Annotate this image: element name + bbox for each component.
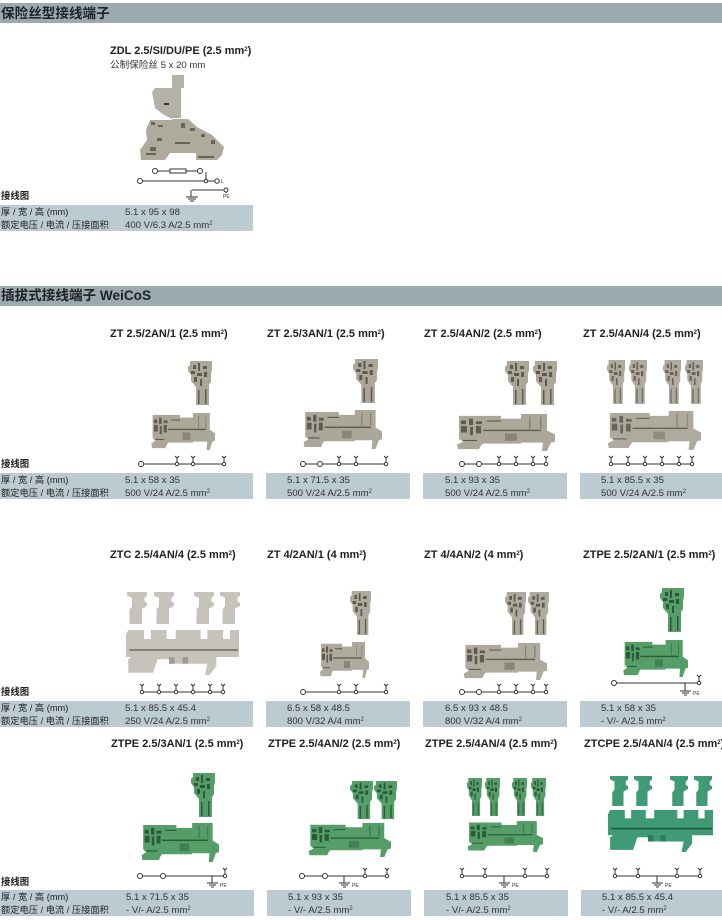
row 3 side labels: 厚 / 宽 / 高 (mm) [1, 891, 68, 902]
spec table: 5.1 x 58 x 35 [601, 703, 656, 714]
spec table: - V/- A/2.5 mm [601, 716, 662, 727]
product: ZTPE 2.5/2AN/1 [580, 549, 722, 727]
spec table [0, 701, 253, 727]
product: ZDL 2.5/SI/DU/PE: ZDL 2.5/SI/DU/PE (2.5 mm [110, 45, 244, 57]
product: ZTPE 2.5/4AN/4 [424, 738, 568, 916]
spec table: 5.1 x 93 x 35 [445, 475, 500, 486]
product: ZT 4/2AN/1: 2 [359, 551, 363, 557]
heading: fuse terminals [0, 3, 722, 23]
product: ZTPE 2.5/4AN/4: 2 [550, 740, 554, 746]
spec table: 2 [663, 906, 667, 912]
spec table: ZDL: 厚 / 宽 / 高 (mm) [1, 206, 68, 217]
spec table: 250 V/24 A/2.5 mm [125, 716, 207, 727]
spec table: ZDL [0, 205, 253, 231]
spec table: - V/- A/2.5 mm [288, 905, 349, 916]
spec table: 500 V/24 A/2.5 mm [125, 488, 207, 499]
wiring diagram [138, 868, 227, 889]
wiring diagram: PE [665, 883, 672, 889]
spec table: - V/- A/2.5 mm [126, 905, 187, 916]
spec table [423, 701, 567, 727]
image: fuse terminal block [140, 75, 224, 160]
spec table: 2 [207, 717, 211, 723]
heading: plug-in terminals [0, 286, 722, 306]
row 2 side labels [1, 686, 109, 726]
product: ZT 2.5/4AN/2: 2 [535, 330, 539, 336]
spec table: 5.1 x 85.5 x 45.4 [125, 703, 197, 714]
wiring diagram: ZDL: L [221, 179, 224, 185]
product: ZT 2.5/4AN/2: ) [538, 328, 542, 340]
product: ZTPE 2.5/3AN/1: ZTPE 2.5/3AN/1 (2.5 mm [111, 738, 236, 750]
product: ZTCPE 2.5/4AN/4: 2 [717, 740, 721, 746]
product: ZT 4/2AN/1 [266, 549, 410, 727]
wiring label: 接线图 [1, 190, 29, 201]
wiring diagram [300, 684, 388, 694]
spec table: 5.1 x 71.5 x 35 [126, 892, 189, 903]
product: ZT 2.5/2AN/1: ZT 2.5/2AN/1 (2.5 mm [110, 328, 221, 340]
product: ZTC 2.5/4AN/4: ) [232, 549, 236, 561]
row 1 side labels: 额定电压 / 电流 / 压接面积 [1, 487, 109, 498]
product: ZT 2.5/2AN/1: 2 [221, 330, 225, 336]
heading: plug-in terminals: 插拔式接线端子 WeiCoS [1, 287, 151, 303]
product: ZTPE 2.5/2AN/1: 2 [708, 551, 712, 557]
spec table: 5.1 x 58 x 35 [125, 475, 180, 486]
row 2 side labels: 接线图 [1, 686, 29, 697]
spec table: 800 V/32 A/4 mm [287, 716, 361, 727]
product: ZT 2.5/4AN/4 [580, 328, 722, 499]
wiring diagram [140, 684, 225, 694]
spec table: 500 V/24 A/2.5 mm [287, 488, 369, 499]
row 2 side labels: 额定电压 / 电流 / 压接面积 [1, 715, 109, 726]
spec table: 5.1 x 85.5 x 35 [446, 892, 509, 903]
row 1 side labels [1, 458, 109, 498]
spec table [267, 890, 411, 916]
spec table [581, 890, 722, 916]
product: ZDL 2.5/SI/DU/PE [0, 45, 253, 231]
spec table: 2 [207, 489, 211, 495]
row 3 side labels: 接线图 [1, 876, 29, 887]
image: terminal [457, 361, 557, 451]
product: ZT 2.5/4AN/4: 2 [694, 330, 698, 336]
product: ZT 4/4AN/2: ZT 4/4AN/2 (4 mm [424, 549, 516, 561]
product: ZTPE 2.5/4AN/4: ) [554, 738, 558, 750]
spec table: 2 [187, 906, 191, 912]
spec table: 2 [527, 489, 531, 495]
wiring diagram: PE [693, 691, 700, 697]
spec table [266, 701, 410, 727]
product: ZDL 2.5/SI/DU/PE: 公制保险丝 5 x 20 mm [110, 59, 205, 71]
product: ZT 4/4AN/2 [423, 549, 567, 727]
spec table: ZDL: 400 V/6.3 A/2.5 mm [125, 220, 209, 231]
spec table: ZDL: 2 [209, 221, 213, 227]
spec table: ZDL: 5.1 x 95 x 98 [125, 207, 180, 218]
product: ZTPE 2.5/4AN/2: 2 [393, 740, 397, 746]
wiring diagram: ZDL: PE [223, 194, 230, 200]
wiring diagram: ZDL [138, 168, 230, 201]
product: ZT 2.5/4AN/2 [423, 328, 567, 499]
spec table: 2 [507, 906, 511, 912]
product: ZT 2.5/3AN/1: ZT 2.5/3AN/1 (2.5 mm [267, 328, 378, 340]
spec table: 2 [369, 489, 373, 495]
wiring diagram: PE [220, 883, 227, 889]
product: ZT 4/2AN/1: ) [363, 549, 367, 561]
spec table [424, 890, 568, 916]
spec table: 800 V/32 A/4 mm [445, 716, 519, 727]
image: terminal [151, 361, 215, 450]
product: ZTC 2.5/4AN/4: 2 [229, 551, 233, 557]
spec table: 500 V/24 A/2.5 mm [445, 488, 527, 499]
row 1 side labels: 厚 / 宽 / 高 (mm) [1, 474, 68, 485]
product: ZTPE 2.5/4AN/2 [267, 738, 411, 916]
wiring diagram [460, 868, 549, 889]
product: ZTPE 2.5/3AN/1 [0, 738, 254, 916]
spec table [580, 701, 722, 727]
image: terminal [607, 360, 703, 450]
product: ZT 2.5/3AN/1: ) [381, 328, 385, 340]
product: ZT 4/2AN/1: ZT 4/2AN/1 (4 mm [267, 549, 359, 561]
product: ZT 2.5/4AN/4: ) [697, 328, 701, 340]
wiring diagram [460, 684, 548, 694]
spec table [580, 473, 722, 499]
spec table [0, 473, 253, 499]
row 3 side labels: 额定电压 / 电流 / 压接面积 [1, 904, 109, 915]
image: terminal [126, 592, 240, 675]
product: ZTPE 2.5/3AN/1: 2 [236, 740, 240, 746]
image: terminal [320, 591, 371, 678]
row 2 side labels: 厚 / 宽 / 高 (mm) [1, 702, 68, 713]
product: ZT 4/4AN/2: ) [520, 549, 524, 561]
spec table: 500 V/24 A/2.5 mm [601, 488, 683, 499]
image: terminal [309, 781, 397, 857]
row 3 side labels [1, 876, 109, 915]
spec table: - V/- A/2.5 mm [602, 905, 663, 916]
product: ZTCPE 2.5/4AN/4: ZTCPE 2.5/4AN/4 (2.5 mm [584, 738, 717, 750]
wiring diagram [612, 675, 701, 697]
wiring diagram: PE [512, 883, 519, 889]
image: terminal [304, 359, 382, 449]
wiring diagram [460, 456, 548, 466]
spec table: 5.1 x 85.5 x 35 [601, 475, 664, 486]
wiring diagram [300, 456, 388, 466]
spec table: 2 [683, 489, 687, 495]
spec table [423, 473, 567, 499]
spec table: 5.1 x 85.5 x 45.4 [602, 892, 674, 903]
spec table [266, 473, 410, 499]
product: ZTPE 2.5/3AN/1: ) [240, 738, 244, 750]
spec table: 6.5 x 58 x 48.5 [287, 703, 350, 714]
spec table: 6.5 x 93 x 48.5 [445, 703, 508, 714]
product: ZTPE 2.5/2AN/1: ZTPE 2.5/2AN/1 (2.5 mm [583, 549, 708, 561]
product: ZDL 2.5/SI/DU/PE: ) [248, 45, 252, 57]
wiring diagram [613, 868, 702, 889]
product: ZT 2.5/2AN/1 [0, 328, 253, 499]
product: ZT 2.5/2AN/1: ) [224, 328, 228, 340]
wiring diagram [138, 456, 226, 466]
spec table: 2 [662, 717, 666, 723]
product: ZDL 2.5/SI/DU/PE: 2 [244, 47, 248, 53]
spec table: 2 [349, 906, 353, 912]
spec table: 2 [361, 717, 365, 723]
spec table [0, 890, 254, 916]
wiring diagram [300, 868, 389, 889]
spec table: 5.1 x 71.5 x 35 [287, 475, 350, 486]
product: ZT 2.5/3AN/1 [266, 328, 410, 499]
image: terminal [464, 592, 549, 680]
image: terminal [608, 776, 713, 852]
product: ZTPE 2.5/2AN/1: ) [712, 549, 716, 561]
product: ZTPE 2.5/4AN/4: ZTPE 2.5/4AN/4 (2.5 mm [425, 738, 550, 750]
image: terminal [142, 773, 219, 862]
wiring diagram: PE [352, 883, 359, 889]
product: ZT 2.5/4AN/4: ZT 2.5/4AN/4 (2.5 mm [583, 328, 694, 340]
image: terminal [467, 778, 546, 852]
spec table: 2 [519, 717, 523, 723]
product: ZT 2.5/3AN/1: 2 [378, 330, 382, 336]
row 1 side labels: 接线图 [1, 458, 29, 469]
spec table: ZDL: 额定电压 / 电流 / 压接面积 [1, 219, 109, 230]
product: ZT 2.5/4AN/2: ZT 2.5/4AN/2 (2.5 mm [424, 328, 535, 340]
spec table: 5.1 x 93 x 35 [288, 892, 343, 903]
product: ZTCPE 2.5/4AN/4 [581, 738, 722, 916]
spec table: - V/- A/2.5 mm [446, 905, 507, 916]
product: ZTPE 2.5/4AN/2: ) [397, 738, 401, 750]
product: ZTC 2.5/4AN/4 [0, 549, 253, 727]
image: terminal [623, 588, 688, 677]
product: ZT 4/4AN/2: 2 [516, 551, 520, 557]
product: ZTPE 2.5/4AN/2: ZTPE 2.5/4AN/2 (2.5 mm [268, 738, 393, 750]
wiring diagram [609, 456, 694, 466]
product: ZTC 2.5/4AN/4: ZTC 2.5/4AN/4 (2.5 mm [110, 549, 229, 561]
heading: fuse terminals: 保险丝型接线端子 [1, 5, 110, 21]
